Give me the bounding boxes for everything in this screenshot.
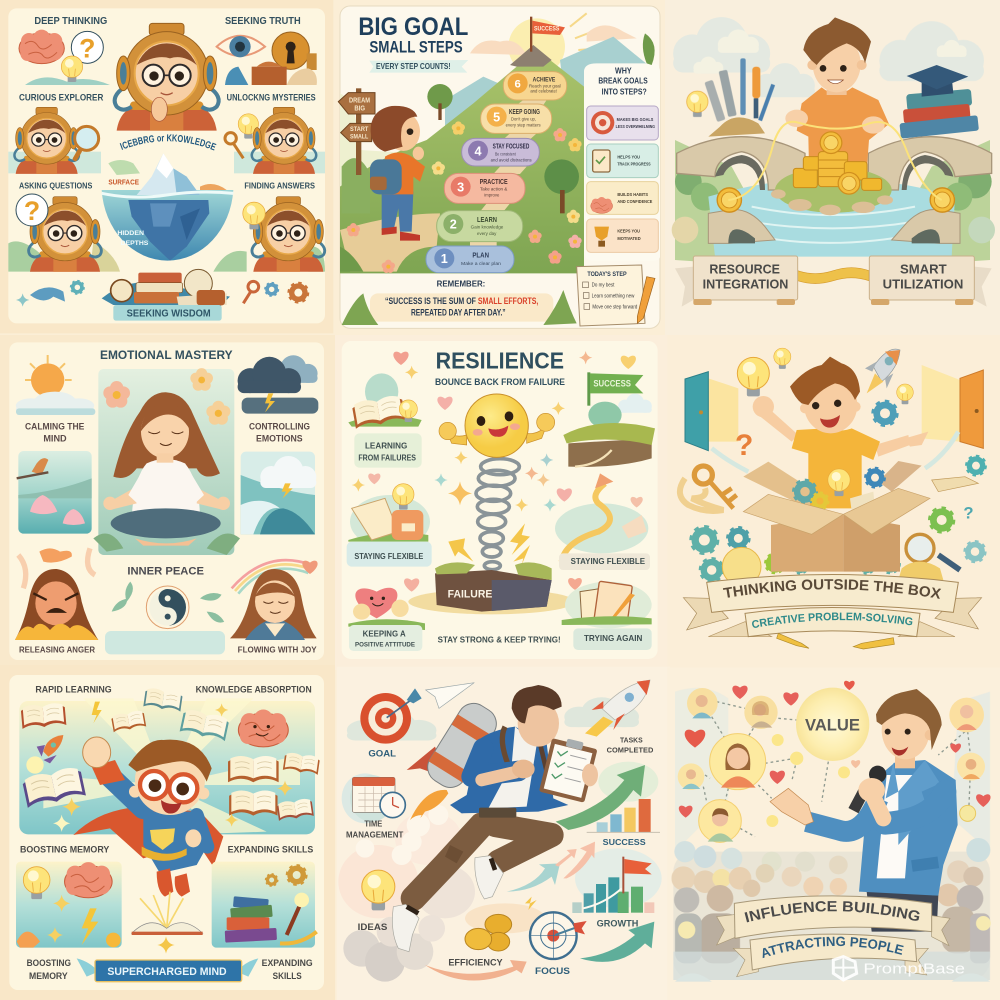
rope	[798, 268, 869, 283]
card: motivated: MOTIVATED	[617, 236, 641, 242]
card: habits: BUILDS HABITS	[617, 192, 649, 198]
banner: supercharged mind	[77, 958, 258, 982]
pencil shape	[932, 477, 978, 492]
sign: resource integration: RESOURCE	[709, 262, 780, 276]
heading: knowledge absorption: KNOWLEDGE ABSORPTION	[196, 684, 312, 694]
icon: brain with question and bulb: ?	[79, 33, 95, 63]
step 4	[462, 138, 539, 166]
watermark: promptbase: PromptBase	[863, 961, 965, 977]
banner: attracting people	[732, 934, 929, 978]
door: orange	[922, 365, 983, 448]
panel: why break goals	[584, 33, 660, 261]
card: positive attitude	[349, 625, 422, 651]
label: stay strong: STAY STRONG & KEEP TRYING!	[438, 634, 561, 644]
step 5: KEEP GOING	[509, 109, 540, 116]
label: controlling emotions: EMOTIONS	[256, 434, 303, 444]
label: flowing with joy: FLOWING WITH JOY	[238, 645, 317, 655]
label: tasks completed: TASKS	[620, 735, 643, 744]
chart: growth	[572, 857, 654, 913]
heading: seeking truth: SEEKING TRUTH	[225, 16, 301, 27]
step 5	[481, 104, 552, 133]
label: calming the mind: MIND	[43, 434, 67, 444]
card: staying flexible left: STAYING FLEXIBLE	[354, 551, 424, 561]
panel: resource integration	[665, 0, 1000, 335]
sign: smart utilization: SMART	[900, 262, 947, 276]
heading: rapid learning: RAPID LEARNING	[35, 684, 112, 694]
label: success: SUCCESS	[603, 837, 646, 847]
bubble: value	[796, 688, 869, 761]
audience crowd	[671, 688, 991, 982]
icon: eye, keyhole and chest	[217, 32, 317, 85]
hearts	[679, 681, 991, 818]
character: boy looking up	[370, 106, 425, 241]
card: trying again	[573, 628, 652, 650]
lightning	[92, 702, 102, 723]
step 3: 3	[457, 180, 464, 194]
step 4: and avoid distractions	[491, 158, 532, 164]
banner: supercharged mind: SUPERCHARGED MIND	[107, 966, 227, 978]
label: ideas: IDEAS	[358, 922, 387, 932]
character: diver finding	[243, 197, 325, 272]
ground: goal terrain	[563, 394, 655, 467]
card: learning from failures: LEARNING	[365, 440, 407, 450]
card: trying again: TRYING AGAIN	[584, 633, 642, 643]
pencils	[777, 633, 894, 649]
flag: success: SUCCESS	[534, 26, 560, 33]
label: time management	[346, 820, 403, 839]
icon: open book and bulb	[348, 373, 422, 429]
character: runner	[392, 685, 598, 952]
step 3: Take action &	[480, 187, 508, 193]
icon: clipboard and pencil	[562, 581, 652, 628]
note: today's step: Move one step forward	[592, 304, 637, 310]
arrows: pink	[555, 842, 595, 878]
rainbow	[232, 560, 318, 594]
sparks around failure	[448, 523, 530, 565]
card: positive attitude: KEEPING A	[363, 629, 406, 639]
step 1: 1	[441, 252, 448, 266]
label: calming the mind: CALMING THE	[25, 421, 84, 431]
label: controlling emotions	[249, 421, 310, 444]
card: staying flexible left	[347, 542, 432, 567]
scene: memory	[16, 862, 122, 948]
label: hidden depths: HIDDEN	[117, 230, 144, 237]
network lines	[703, 702, 970, 837]
icon: happy heart	[348, 588, 425, 630]
panel: iceberg of knowledge	[0, 0, 334, 334]
panel: influence building	[630, 680, 991, 982]
icons: bottom strip	[16, 269, 308, 321]
label: calming the mind	[25, 421, 84, 444]
path arrow	[555, 473, 648, 562]
label: time management: TIME	[364, 820, 383, 829]
character: diver with bulb and key	[225, 107, 316, 174]
coin stacks	[717, 132, 954, 212]
swooshes	[712, 432, 958, 472]
step 6	[503, 72, 567, 100]
signpost	[338, 88, 375, 175]
character: diver asking: ?	[24, 196, 40, 226]
heading: asking questions: ASKING QUESTIONS	[19, 180, 93, 190]
heading: deep thinking: DEEP THINKING	[34, 16, 108, 27]
step 6: 6	[515, 78, 521, 90]
card: learning from failures	[354, 433, 422, 468]
banner: seeking wisdom	[113, 305, 222, 321]
heading: remember: REMEMBER:	[437, 279, 485, 289]
step 5: Don't give up,	[511, 117, 536, 123]
arrow: efficiency	[425, 960, 527, 981]
character: joyful girl	[230, 569, 317, 640]
footpath	[340, 213, 440, 272]
card: overwhelm: LESS OVERWHELMING	[616, 124, 655, 130]
icon: tools and bulb	[687, 58, 775, 137]
sign: smart utilization	[869, 256, 992, 307]
clipboard	[539, 735, 598, 803]
panel: why break goals: BREAK GOALS	[598, 75, 648, 85]
sign: resource integration: INTEGRATION	[703, 278, 788, 292]
character: boy	[785, 17, 889, 167]
signpost: START	[350, 126, 368, 133]
sign: smart utilization: UTILIZATION	[883, 278, 963, 292]
watermark: promptbase	[833, 957, 965, 980]
flag: success	[587, 372, 643, 406]
card: staying flexible right	[559, 553, 650, 570]
step 1	[426, 246, 514, 273]
label: growth: GROWTH	[597, 919, 638, 929]
character: boy	[753, 357, 928, 508]
banner: thinking outside the box: THINKING OUTSIDE THE BOX	[722, 579, 942, 599]
banner: thinking outside the box	[682, 574, 982, 630]
label: inner peace: INNER PEACE	[127, 565, 204, 577]
note: today's step: TODAY'S STEP	[587, 271, 627, 278]
key and swirl	[680, 466, 737, 511]
step 4: STAY FOCUSED	[493, 144, 529, 151]
spring	[476, 459, 519, 570]
banner: attracting people: ATTRACTING PEOPLE	[762, 936, 904, 958]
open box	[743, 461, 930, 572]
rock: failure: FAILURE	[448, 588, 493, 600]
label: tasks completed: COMPLETED	[607, 745, 653, 754]
quote box	[370, 293, 553, 322]
label: boosting memory bottom: MEMORY	[29, 971, 68, 981]
panel: resilience	[335, 335, 670, 670]
step 1: Make a clear plan	[461, 261, 501, 267]
iceberg diagram	[102, 153, 233, 261]
arrow: growth	[580, 922, 654, 962]
icons: bulbs rocket: ?	[963, 503, 974, 522]
character: angry girl with fire	[15, 548, 98, 640]
banner: influence building: INFLUENCE BUILDING	[744, 901, 920, 922]
icon: smiling brain	[238, 709, 288, 747]
icon: sun and cloud	[16, 355, 95, 415]
icon: rocket	[26, 735, 63, 774]
rock: failure	[408, 562, 575, 614]
network avatars	[678, 688, 985, 842]
panel: why break goals: INTO STEPS?	[602, 86, 647, 96]
books	[21, 687, 320, 821]
smiling ball	[439, 394, 555, 457]
label: efficiency: EFFICIENCY	[448, 958, 503, 968]
open book with glow	[132, 892, 203, 954]
heading: finding answers: FINDING ANSWERS	[244, 180, 315, 190]
icons: bulbs rocket	[735, 348, 974, 522]
label: focus: FOCUS	[535, 966, 570, 976]
ribbon: every step counts: EVERY STEP COUNTS!	[376, 61, 451, 71]
flag: success: SUCCESS	[593, 379, 631, 389]
character: diver asking	[16, 194, 101, 272]
card: overwhelm	[587, 106, 658, 140]
note: today's step: Learn something new	[592, 293, 634, 299]
step 2: Gain knowledge	[471, 225, 504, 231]
hill	[340, 60, 584, 273]
card: motivated: KEEPS YOU	[617, 229, 640, 235]
subheading: BOUNCE BACK FROM FAILURE	[435, 377, 565, 387]
chart: success bars	[587, 799, 660, 832]
label: expanding skills bottom	[262, 958, 313, 981]
step 2	[437, 211, 523, 242]
heading: iceberg of knowledge: ICEBBRG or KKOWLEDGE	[120, 134, 216, 150]
heading: boosting memory: BOOSTING MEMORY	[20, 845, 109, 855]
arrows: pale	[507, 863, 560, 892]
flowers and trees	[340, 84, 582, 273]
label: time management: MANAGEMENT	[346, 830, 403, 839]
step 2: 2	[450, 218, 457, 232]
heading: expanding skills: EXPANDING SKILLS	[228, 845, 313, 855]
card: habits	[587, 182, 658, 214]
label: surface: SURFACE	[108, 177, 139, 186]
panel: thinking outside the box	[676, 348, 987, 650]
icons: bulbs rocket: ?	[735, 429, 753, 462]
banner: influence building	[716, 895, 950, 946]
plants	[342, 293, 378, 325]
note: today's step: Do my best	[592, 283, 615, 289]
arrow: success	[556, 765, 645, 830]
card: track progress: TRACK PROGRESS	[617, 161, 651, 167]
label: releasing anger: RELEASING ANGER	[19, 645, 95, 655]
label: boosting memory bottom: BOOSTING	[27, 958, 71, 968]
icon: checklist and bulb	[348, 484, 430, 548]
label: expanding skills bottom: SKILLS	[273, 971, 302, 981]
step 1: PLAN	[472, 250, 489, 259]
step 4: 4	[474, 144, 482, 158]
panel: supercharged mind	[0, 665, 335, 1000]
card: motivated	[587, 219, 658, 252]
character: speaker	[770, 689, 958, 932]
panel: emotional mastery	[0, 335, 335, 670]
icon: rocket	[585, 680, 650, 737]
card: track progress	[587, 144, 658, 178]
scene: lake with bird and lotus	[17, 451, 92, 534]
yin yang with leaves	[105, 582, 225, 654]
step 6: Reach your goal	[529, 83, 561, 88]
card: staying flexible right: STAYING FLEXIBLE	[571, 556, 645, 566]
sign: resource integration	[675, 256, 798, 307]
card: track progress: HELPS YOU	[617, 154, 640, 160]
scene: skills	[212, 862, 317, 948]
quote box: “SUCCESS IS THE SUM OF SMALL EFFORTS,	[385, 296, 538, 306]
card: habits: AND CONFIDENCE	[617, 199, 653, 205]
step 3	[444, 173, 525, 203]
card: overwhelm: MAKES BIG GOALS	[617, 117, 654, 123]
heading: EMOTIONAL MASTERY	[100, 348, 233, 362]
meditation scene	[93, 368, 240, 555]
sky and mountains	[340, 13, 650, 273]
clouds	[672, 17, 995, 263]
iceberg diagram: DEPTHS	[121, 240, 149, 247]
magnifier and bulbs	[722, 534, 960, 586]
flag: success	[510, 17, 565, 67]
scene: top band	[19, 701, 315, 834]
light rays	[43, 698, 300, 833]
quote box: REPEATED DAY AFTER DAY.”	[411, 308, 506, 318]
icon: brain with question and bulb	[19, 30, 110, 85]
background clouds	[338, 697, 662, 982]
step 6: and celebrate!	[530, 89, 557, 94]
label: expanding skills bottom: EXPANDING	[262, 958, 313, 968]
books and graduation cap	[899, 65, 979, 139]
panel: big goal small steps	[338, 6, 660, 328]
confetti	[352, 351, 643, 592]
step 3: improve	[484, 193, 500, 199]
card: positive attitude: POSITIVE ATTITUDE	[355, 642, 416, 649]
icon: gold coins	[465, 897, 537, 951]
banner: creative problem-solving: CREATIVE PROBLEM-SOLVING	[752, 612, 912, 628]
step 4: Be consistent	[495, 152, 516, 158]
character: super boy	[73, 737, 223, 897]
heading: RESILIENCE	[436, 347, 564, 373]
signpost: BIG	[354, 106, 365, 113]
step 2: every day	[477, 231, 497, 237]
icon: target and arrow	[360, 688, 422, 744]
heading: small steps: SMALL STEPS	[369, 38, 463, 57]
panel: productivity runner	[337, 667, 670, 1000]
step 5: every step matters	[506, 123, 541, 129]
scene: waves with cloud	[241, 452, 316, 534]
icon: paper plane	[426, 683, 474, 708]
step 5: 5	[493, 110, 500, 124]
stars	[53, 703, 293, 832]
label: tasks completed	[607, 735, 653, 754]
note: today's step	[577, 265, 655, 326]
character: diver with magnifier	[14, 107, 99, 174]
gears	[691, 401, 986, 581]
bubble: value: VALUE	[805, 716, 860, 735]
panel: why break goals: WHY	[615, 65, 632, 75]
character: big diver	[115, 23, 219, 131]
label: boosting memory bottom	[27, 958, 71, 981]
water	[708, 178, 955, 257]
signpost: DREAM	[349, 98, 370, 105]
bridges	[677, 137, 992, 243]
label: controlling emotions: CONTROLLING	[249, 421, 310, 431]
card: learning from failures: FROM FAILURES	[358, 452, 416, 462]
icon: focus target	[530, 912, 587, 959]
heading: curious explorer: CURIOUS EXPLORER	[19, 93, 104, 103]
step 2: LEARN	[477, 215, 497, 224]
icon: storm cloud	[238, 355, 318, 414]
icon: calendar and clock	[350, 775, 405, 822]
heading: unlocking mysteries: UNLOCKNG MYSTERIES	[227, 93, 316, 103]
step 6: ACHIEVE	[533, 77, 555, 84]
banner: seeking wisdom: SEEKING WISDOM	[127, 309, 211, 320]
door: teal	[685, 372, 738, 451]
label: goal: GOAL	[368, 749, 396, 759]
heading: big goal: BIG GOAL	[358, 13, 468, 41]
signpost: SMALL	[350, 133, 368, 140]
banner: creative problem-solving	[708, 607, 956, 638]
step 3: PRACTICE	[480, 177, 508, 186]
icon: idea bulb	[362, 870, 395, 910]
glowing connection strand	[728, 122, 942, 200]
island	[771, 167, 893, 215]
